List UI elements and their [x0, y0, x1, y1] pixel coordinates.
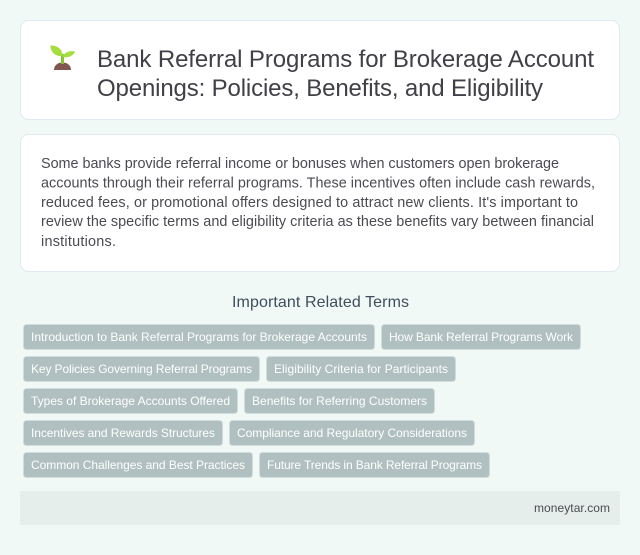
- title: Bank Referral Programs for Brokerage Account: [97, 46, 594, 73]
- title: [97, 46, 594, 102]
- footer bar: [20, 491, 620, 525]
- tag: challenges: [24, 452, 252, 478]
- tag: compliance: [230, 420, 474, 446]
- tag: challenges: Common Challenges and Best Practices: [31, 458, 245, 472]
- tag: incentives: [24, 420, 222, 446]
- text block: description: Some banks provide referral income or bonuses when customers open brokerage: [41, 156, 559, 172]
- tag: key policies: [24, 356, 260, 382]
- footer source text: moneytar.com: [534, 501, 610, 515]
- title: Openings: Policies, Benefits, and Eligibility: [97, 75, 543, 102]
- icon: seedling: [50, 45, 75, 70]
- tag: key policies: Key Policies Governing Referral Programs: [31, 362, 252, 376]
- heading: important related terms: Important Related Terms: [232, 294, 409, 311]
- tag: eligibility: Eligibility Criteria for Participants: [274, 362, 448, 376]
- tag: account types: Types of Brokerage Accounts Offered: [31, 394, 230, 408]
- panel: description card: [20, 134, 620, 272]
- text block: description: [41, 156, 595, 250]
- tag: benefits: Benefits for Referring Customers: [252, 394, 427, 408]
- tag: eligibility: [266, 356, 456, 382]
- tag list: [24, 324, 580, 478]
- panel: title card: [20, 20, 620, 120]
- tag: introduction: [24, 324, 374, 350]
- tag: future trends: Future Trends in Bank Referral Programs: [267, 458, 482, 472]
- text block: description: accounts through their referral programs. These incentives often include cash rewards,: [41, 176, 595, 192]
- tag: how programs work: How Bank Referral Programs Work: [389, 330, 574, 344]
- text block: description: institutions.: [41, 234, 116, 250]
- tag: account types: [24, 388, 238, 414]
- tag: how programs work: [382, 324, 580, 350]
- tag: compliance: Compliance and Regulatory Considerations: [237, 426, 467, 440]
- text block: description: reduced fees, or promotional offers designed to attract new clients. It's important to: [41, 195, 578, 211]
- tag: incentives: Incentives and Rewards Structures: [31, 426, 215, 440]
- text block: description: review the specific terms and eligibility criteria as these benefits vary between financial: [41, 214, 594, 230]
- tag: future trends: [260, 452, 490, 478]
- tag: introduction: Introduction to Bank Referral Programs for Brokerage Accounts: [31, 330, 367, 344]
- tag: benefits: [244, 388, 434, 414]
